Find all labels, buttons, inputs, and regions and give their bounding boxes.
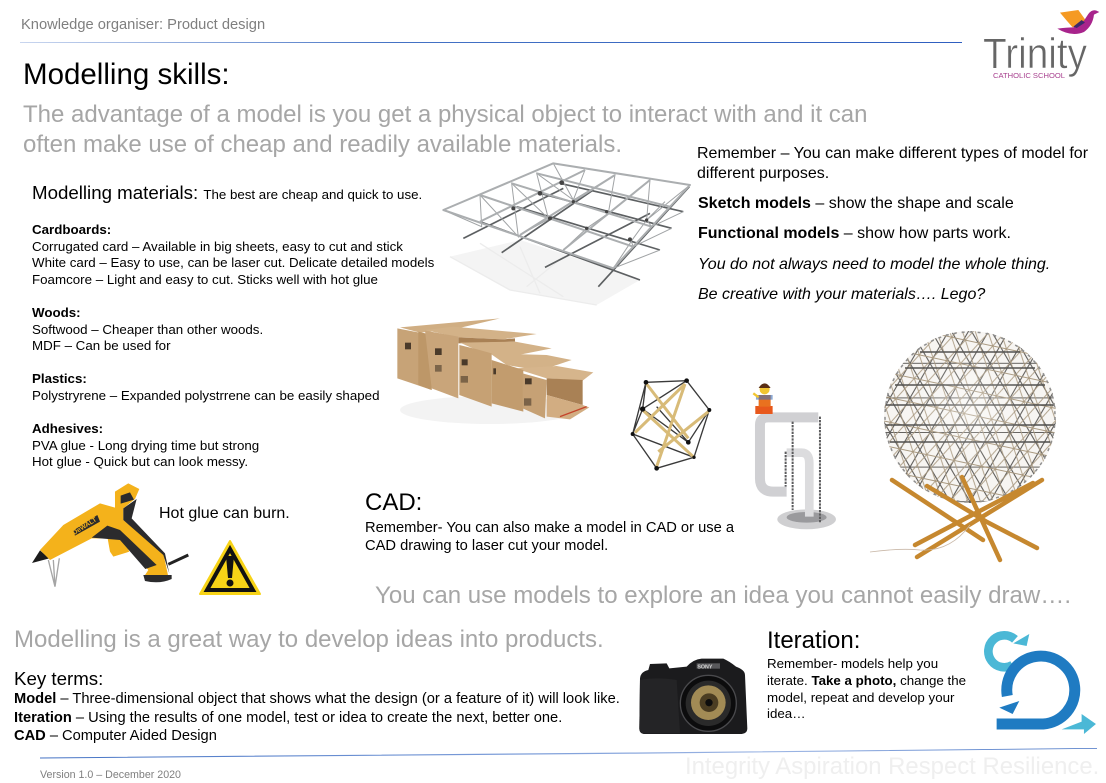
key terms heading: Key terms: — [14, 668, 103, 689]
functional models: Functional models – show how parts work. — [698, 225, 1011, 242]
image: Sony camera — [639, 659, 747, 734]
school values footer: Integrity Aspiration Respect Resilience. — [685, 753, 1099, 780]
panel: types of model — [697, 145, 1088, 303]
version note: Version 1.0 – December 2020 — [40, 769, 181, 781]
icon: iteration loop arrows — [988, 634, 1096, 734]
materials list: Adhesives: — [32, 421, 103, 436]
iteration text: Remember- models help you — [767, 656, 938, 671]
remember text — [697, 145, 1088, 182]
materials list: White card – Easy to use, can be laser cut. Delicate detailed models — [32, 255, 434, 270]
warning label: Hot glue can burn. — [159, 505, 290, 522]
panel: key terms — [14, 668, 620, 744]
materials list: Woods: — [32, 305, 81, 320]
title: Modelling skills: — [23, 58, 230, 91]
grey statement: explore ideas: You can use models to explore an idea you cannot easily draw…. — [375, 582, 1071, 609]
materials list: Foamcore – Light and easy to cut. Sticks well with hot glue — [32, 272, 378, 287]
icon: warning triangle — [200, 541, 260, 594]
CAD text — [365, 520, 734, 554]
logo: Trinity Catholic School: CATHOLIC SCHOOL — [993, 71, 1065, 80]
logo: Trinity Catholic School: Trinity — [983, 30, 1087, 78]
intro statement — [23, 101, 868, 158]
key terms list — [14, 691, 620, 744]
image: space-frame truss model — [443, 163, 690, 305]
image: tensegrity model — [631, 378, 711, 471]
image: nested cardboard boxes — [397, 318, 593, 424]
panel: iteration — [767, 627, 966, 721]
image: yellow hot glue gun — [32, 483, 188, 587]
italic prompt: Be creative with your materials…. Lego? — [698, 286, 985, 303]
logo: Trinity Catholic School — [983, 10, 1099, 80]
materials list: Corrugated card – Available in big sheets, easy to cut and stick — [32, 239, 403, 254]
panel: CAD — [365, 489, 734, 554]
materials list — [32, 222, 434, 469]
grey statement: develop ideas: Modelling is a great way to develop ideas into products. — [14, 626, 604, 653]
remember text: different purposes. — [697, 164, 829, 182]
intro statement: The advantage of a model is you get a physical object to interact with and it can — [23, 101, 868, 128]
remember text: Remember – You can make different types of model for — [697, 145, 1088, 162]
iteration text — [767, 656, 966, 721]
CAD text: CAD drawing to laser cut your model. — [365, 538, 608, 554]
iteration text: model, repeat and develop your — [767, 690, 954, 705]
CAD heading: CAD: — [365, 489, 422, 516]
materials list: Hot glue - Quick but can look messy. — [32, 454, 248, 469]
CAD text: Remember- You can also make a model in CAD or use a — [365, 520, 734, 536]
key terms list: Iteration – Using the results of one model, test or idea to create the next, better one. — [14, 710, 562, 726]
page header: Knowledge organiser: Product design — [21, 17, 265, 33]
image: yellow hot glue gun: DeWALT — [72, 517, 98, 537]
image: spherical lamp — [870, 330, 1060, 560]
materials list: Polystryrene – Expanded polystrrene can be easily shaped — [32, 388, 379, 403]
sketch models: Sketch models – show the shape and scale — [698, 195, 1014, 212]
image: clamp and Lego figure model — [753, 383, 836, 529]
intro statement: often make use of cheap and readily available materials. — [23, 131, 622, 158]
iteration text: idea… — [767, 706, 806, 721]
heading: modelling materials: Modelling materials: The best are cheap and quick to use. — [32, 182, 422, 203]
image: Sony camera: SONY — [697, 664, 713, 670]
materials list: MDF – Can be used for — [32, 338, 171, 353]
materials list: Softwood – Cheaper than other woods. — [32, 322, 263, 337]
panel: modelling materials — [32, 182, 434, 469]
italic notes: You do not always need to model the whole thing. — [698, 256, 1050, 273]
materials list: Plastics: — [32, 371, 87, 386]
iteration text: iterate. Take a photo, change the — [767, 673, 966, 688]
materials list: PVA glue - Long drying time but strong — [32, 438, 259, 453]
materials list: Cardboards: — [32, 222, 111, 237]
iteration heading: Iteration: — [767, 627, 860, 654]
key terms list: CAD – Computer Aided Design — [14, 728, 217, 744]
key terms list: Model – Three-dimensional object that shows what the design (or a feature of it) will look like. — [14, 691, 620, 707]
